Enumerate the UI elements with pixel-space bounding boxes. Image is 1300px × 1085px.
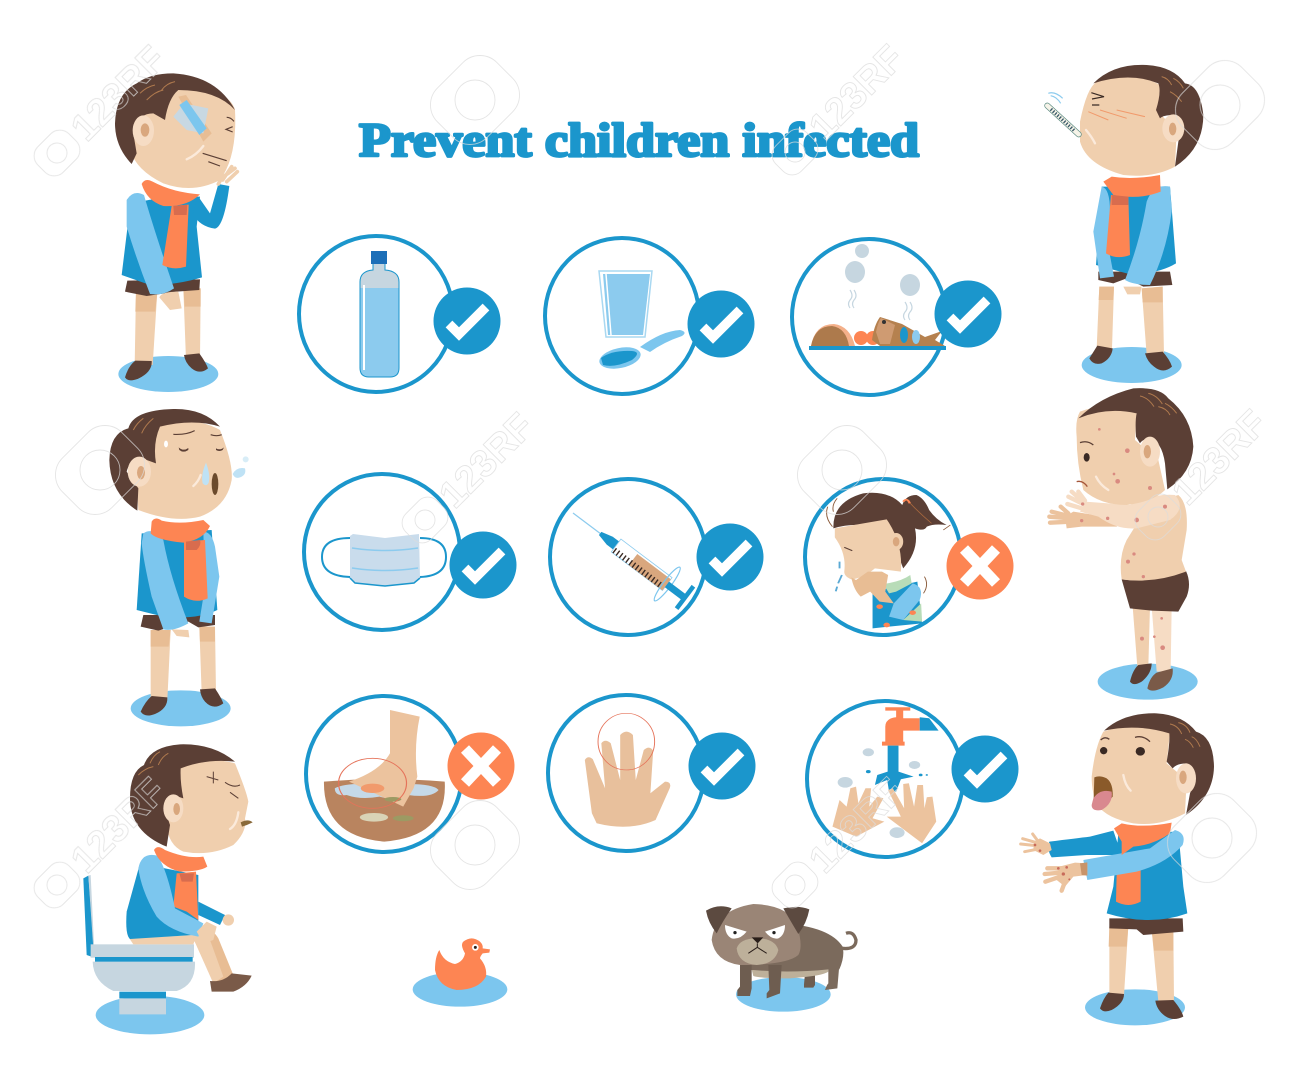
watermark overlays [28, 37, 1275, 917]
watermark overlays: 123RF [63, 38, 174, 149]
icon: bottle [360, 251, 399, 377]
badge: cross [448, 732, 514, 800]
character: boy on toilet [83, 744, 253, 1034]
icon: hand [585, 713, 670, 827]
icon: dog [706, 904, 856, 998]
badge: check [434, 288, 500, 354]
watermark overlays: 123RF [431, 405, 542, 516]
angry dog on blue spot [706, 904, 856, 1012]
panel: cooked food [792, 239, 1002, 395]
watermark overlays: 123RF [801, 37, 912, 148]
panel: glass of water and spoon [545, 238, 754, 394]
badge: check [934, 280, 1002, 348]
badge: check [688, 732, 756, 800]
title: Prevent children infected [359, 114, 919, 167]
panel: clean hand and nails [548, 695, 756, 851]
panel: coughing girl [805, 479, 1014, 635]
icon: tap and hands [832, 707, 939, 843]
duck on blue spot [413, 938, 507, 1007]
watermark overlays: 123RF [1164, 402, 1275, 513]
badge: cross [946, 532, 1014, 600]
icon: foot and basin [324, 710, 445, 842]
watermark overlays: 123RF [801, 770, 912, 881]
badge: check [450, 532, 516, 598]
panel: foot in dirty basin [306, 696, 514, 852]
watermark overlays: 123RF [63, 770, 174, 881]
icon: meat and fish on plate [809, 317, 946, 350]
icon: syringe [560, 496, 699, 616]
panel: face mask [304, 474, 516, 630]
badge: check [688, 290, 754, 358]
panel: washing hands [807, 701, 1018, 857]
badge: check [952, 736, 1018, 802]
icon: coughing girl [827, 493, 950, 628]
character: boy with eye patch and toothache [115, 73, 237, 392]
icon: steam [845, 244, 920, 320]
character: boy with rash [1049, 388, 1198, 700]
character: boy with runny nose [109, 409, 249, 726]
icon: spoon [597, 330, 685, 372]
badge: check [696, 524, 764, 590]
character: boy with thermometer [1047, 65, 1203, 383]
panel: vaccine syringe [550, 479, 764, 635]
icon: mask [322, 534, 446, 586]
icon: glass [599, 271, 652, 337]
icon: duck [435, 938, 490, 990]
panel: water bottle [299, 236, 500, 392]
character: boy showing tongue and rash hands [1021, 713, 1214, 1025]
